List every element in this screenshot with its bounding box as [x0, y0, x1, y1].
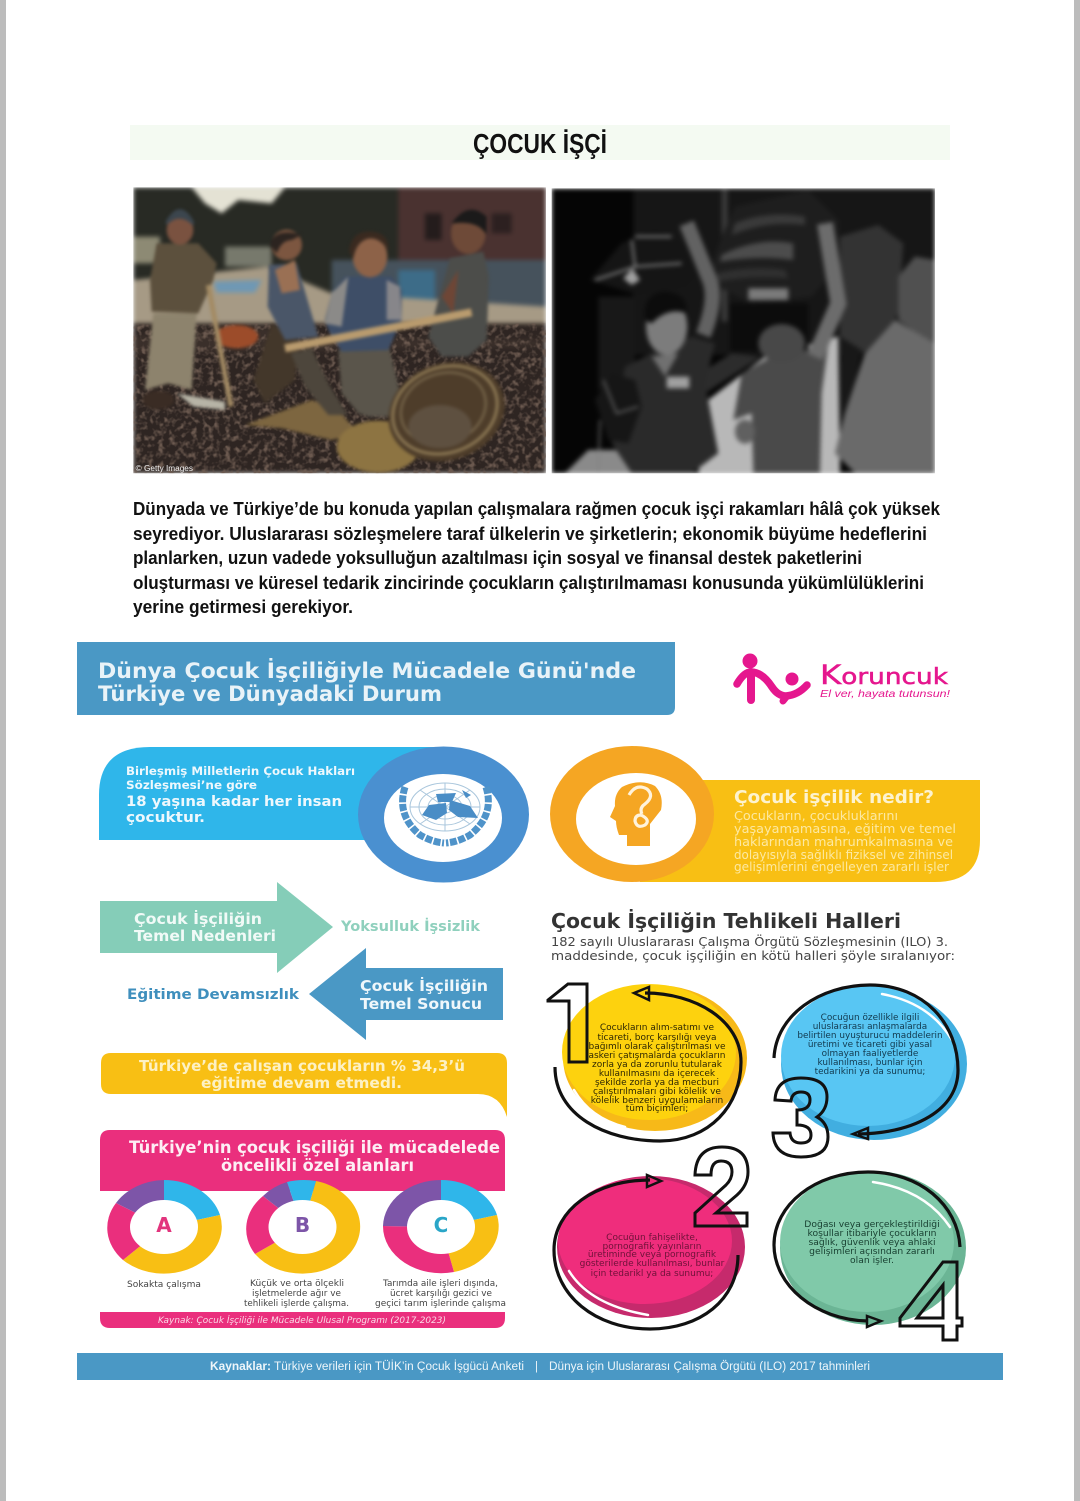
donut A: A [156, 1213, 172, 1237]
captions: tehlikeli işlerde çalışma. [244, 1299, 349, 1309]
icon: UN emblem [403, 783, 488, 843]
bubble 4: green [774, 1171, 966, 1340]
bubble 1: yellow: Çocukların alım-satımı ve [600, 1023, 715, 1033]
arrow: main consequence: Eğitime Devamsızlık [127, 987, 299, 1003]
bubble 1: yellow: bağımlı olarak çalıştırılması ve [589, 1042, 726, 1052]
donut C: C [434, 1213, 448, 1237]
callout: 34.3 percent: Türkiye’de çalışan çocukların % 34,3’ü [139, 1057, 465, 1075]
panel: UN definition of a child: Sözleşmesi’ne göre [126, 778, 257, 792]
bubble 1: yellow: şekilde zorla ya da mecburi [595, 1078, 719, 1088]
footer bar: sources: Dünya için Uluslararası Çalışma Örgütü (ILO) 2017 tahminleri [549, 1361, 870, 1373]
icon: head with question mark [610, 782, 662, 846]
donut A [107, 1180, 222, 1274]
bubble 1: yellow: tüm biçimleri; [626, 1104, 688, 1114]
header bar [77, 642, 675, 715]
arrow: root causes [100, 882, 480, 973]
bubble 2: pink: üretiminde veya pornografik [588, 1250, 717, 1260]
number 3 [773, 1078, 828, 1157]
heading: hazardous forms: 182 sayılı Uluslararası Çalışma Örgütü Sözleşmesinin (ILO) 3. [551, 933, 948, 949]
title band [130, 125, 950, 160]
bubble 1: yellow: kullanılmasını da içerecek [599, 1069, 716, 1079]
arrow: main consequence [127, 948, 503, 1040]
panel: UN definition of a child: 18 yaşına kadar her insan [126, 794, 342, 810]
panel: what is child labour: haklarından mahrumkalmasına ve [734, 835, 953, 849]
arrow: root causes: Çocuk İşçiliğin [134, 909, 262, 928]
callout: 34.3 percent [101, 1053, 507, 1117]
paragraph: seyrediyor. Uluslararası sözleşmelere taraf ülkelerin ve şirketlerin; ekonomik büyüme hedeflerini [133, 524, 927, 544]
right figures [840, 225, 903, 353]
paragraph: oluşturması ve küresel tedarik zincirinde çocukların çalıştırılmaması konusunda yükümlülüklerini [133, 573, 924, 593]
bubble 1: yellow: zorla ya da zorunlu tutularak [592, 1060, 723, 1070]
paragraph: yerine getirmesi gerekiyor. [133, 597, 353, 617]
panel: UN definition of a child: çocuktur. [126, 810, 205, 826]
panel: UN definition of a child: Birleşmiş Milletlerin Çocuk Hakları [126, 764, 355, 778]
header bar: Dünya Çocuk İşçiliğiyle Mücadele Günü'nde [98, 658, 636, 683]
bubble 3: blue: tedarikini ya da sunumu; [815, 1067, 925, 1077]
captions: geçici tarım işlerinde çalışma [375, 1299, 506, 1309]
panel: priority areas in Turkey: Türkiye’nin çocuk işçiliği ile mücadelede [129, 1138, 500, 1158]
bubble 2: pink: gösterilerde kullanılması, bunlar [580, 1259, 725, 1269]
photo: children working on gravel [133, 187, 546, 477]
bubble 3: blue: uluslararası anlaşmalarda [813, 1022, 927, 1032]
boy 2 [731, 348, 830, 474]
panel: what is child labour: yaşayamamasına, eğitim ve temel [734, 822, 956, 836]
sand and bricks [245, 400, 358, 440]
panel: UN definition of a child [99, 746, 529, 882]
captions [127, 1279, 506, 1309]
footer bar: sources [77, 1353, 1003, 1380]
left boy [145, 313, 197, 390]
logo: Koruncuk: Koruncuk [820, 660, 948, 691]
bubble 1: yellow: kölelik benzeri uygulamaların [591, 1096, 723, 1106]
bubble 1: yellow: askeri çatışmalarda çocukların [588, 1051, 726, 1061]
panel: priority areas in Turkey: öncelikli özel alanları [221, 1156, 414, 1176]
header bar: Türkiye ve Dünyadaki Durum [98, 682, 442, 706]
scoop [291, 348, 348, 415]
photo: boys carrying loads on their heads [552, 188, 935, 473]
centre load [720, 228, 728, 290]
bubble 3: blue [773, 985, 967, 1157]
paragraph [133, 499, 941, 617]
arrow: root causes: Yoksulluk İşsizlik [340, 918, 480, 935]
donut B [246, 1180, 360, 1274]
panel: what is child labour [550, 746, 980, 882]
bubble 4: green: sağlık, güvenlik veya ahlaki [808, 1237, 936, 1248]
captions: Küçük ve orta ölçekli [250, 1279, 344, 1289]
logo: Koruncuk: El ver, hayata tutunsun! [820, 688, 950, 700]
bubble 1: yellow [548, 984, 747, 1141]
left load [593, 241, 633, 292]
panel: what is child labour: Çocukların, çocukluklarını [734, 809, 898, 823]
captions: ücret karşılığı gezici ve [390, 1289, 492, 1299]
donut B: B [295, 1213, 310, 1237]
bubble 4: green: olan işler. [850, 1255, 894, 1266]
arrow: main consequence: Çocuk İşçiliğin [360, 976, 488, 995]
captions: Sokakta çalışma [127, 1280, 201, 1290]
heading: hazardous forms [551, 909, 955, 963]
panel: priority areas in Turkey [100, 1130, 506, 1328]
callout: 34.3 percent: eğitime devam etmedi. [201, 1074, 402, 1092]
panel: what is child labour: gelişimlerini engelleyen zararlı işler [734, 860, 949, 874]
bubble 4: green: Doğası veya gerçekleştirildiği [804, 1219, 940, 1230]
donut C [383, 1180, 499, 1273]
bubble 3: blue: kullanılması, bunlar için [818, 1058, 922, 1068]
bubble 3: blue: belirtilen uyuşturucu maddelerin [797, 1031, 943, 1041]
arrow: main consequence: Temel Sonucu [360, 995, 482, 1013]
bubble 2: pink: için tedarikl ya da sunumu; [591, 1269, 713, 1279]
source strip [100, 1312, 505, 1328]
bubble 1: yellow: çalıştırılmaları gibi kölelik ve [593, 1087, 721, 1097]
bubble 3: blue: olmayan faaliyetlerde [822, 1049, 918, 1059]
arrow: root causes: Temel Nedenleri [134, 927, 276, 945]
logo: Koruncuk [737, 654, 950, 701]
number 2 [695, 1147, 748, 1226]
centre boy [338, 343, 400, 417]
bubble 3: blue: Çocuğun özellikle ilgili [821, 1013, 919, 1023]
bubble 3: blue: üretimi ve ticareti gibi yasal [808, 1040, 932, 1050]
paragraph: Dünyada ve Türkiye’de bu konuda yapılan çalışmalara rağmen çocuk işçi rakamları hâlâ çok yüksek [133, 499, 941, 519]
bubble 4: green: koşullar itibariyle çocukların [808, 1228, 937, 1239]
right boy [428, 252, 489, 357]
captions: Tarımda aile işleri dışında, [382, 1279, 498, 1289]
paragraph: planlarken, uzun vadede yoksulluğun azaltılması için sosyal ve finansal destek paketlerini [133, 548, 862, 568]
footer bar: sources: Kaynaklar: [210, 1361, 271, 1373]
girl [253, 323, 298, 403]
footer bar: sources: Türkiye verileri için TÜİK’in Çocuk İşgücü Anketi [274, 1360, 524, 1373]
boy 1 [612, 337, 718, 473]
number 4 [900, 1262, 962, 1340]
bubble 2: pink: Çocuğun fahişelikte, [606, 1233, 698, 1243]
bubble 1: yellow: ticareti, borç karşılığı veya [597, 1033, 717, 1043]
photo: children working on gravel: © Getty Images [136, 463, 193, 473]
heading: hazardous forms: Çocuk İşçiliğin Tehlikeli Halleri [551, 909, 901, 933]
bubble 2: pink: pornografik yayınların [603, 1242, 701, 1252]
bubble 2: pink [554, 1147, 748, 1329]
number 1 [548, 984, 587, 1062]
captions: işletmelerde ağır ve [252, 1289, 341, 1299]
footer bar: sources: | [535, 1361, 538, 1373]
basket [387, 361, 506, 462]
panel: what is child labour: Çocuk işçilik nedir? [734, 787, 934, 808]
title band: ÇOCUK İŞÇİ [473, 128, 607, 159]
bubble 4: green: gelişimleri açısından zararlı [809, 1246, 935, 1257]
heading: hazardous forms: maddesinde, çocuk işçiliğin en kötü halleri şöyle sıralanıyor: [551, 949, 955, 963]
source strip: Kaynak: Çocuk İşçiliği ile Mücadele Ulusal Programı (2017-2023) [158, 1315, 446, 1326]
panel: what is child labour: dolayısıyla sağlıklı fiziksel ve zihinsel [734, 848, 953, 862]
